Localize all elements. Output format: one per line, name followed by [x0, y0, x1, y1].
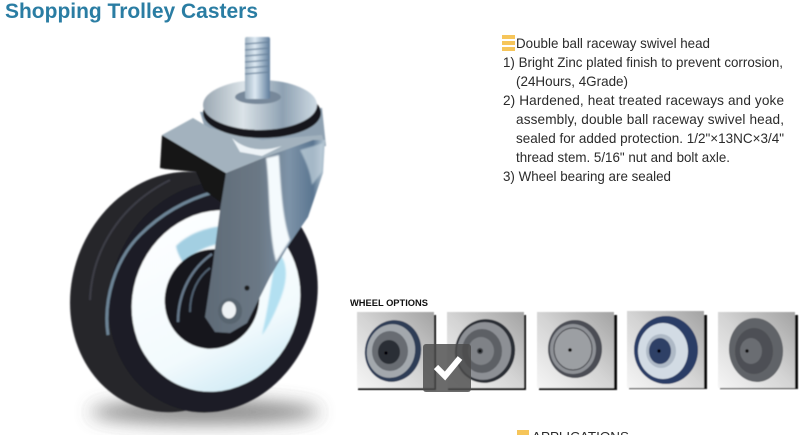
threaded stem — [235, 37, 281, 104]
wheel option 5 — [718, 312, 798, 389]
caster photo illustration — [37, 37, 350, 435]
wheel option 3 — [537, 312, 617, 390]
specification text block: assembly, double ball raceway swivel head, — [516, 112, 784, 127]
specification text block: thread stem. 5/16" nut and bolt axle. — [516, 150, 730, 165]
wheel options heading: WHEEL OPTIONS — [350, 298, 428, 308]
tire — [37, 141, 350, 435]
shoulder — [200, 108, 326, 156]
specification text block: 2) Hardened, heat treated raceways and yoke — [503, 93, 784, 108]
white hub — [105, 185, 327, 417]
specification text block: 1) Bright Zinc plated finish to prevent corrosion, — [503, 55, 783, 70]
specification text block: (24Hours, 4Grade) — [516, 74, 628, 89]
wheel option 2 — [447, 312, 526, 390]
specification text block: Double ball raceway swivel head — [516, 36, 710, 51]
title: Shopping Trolley Casters — [5, 0, 258, 23]
yoke — [205, 140, 325, 333]
wheel option 4 — [627, 311, 707, 389]
axle bolt — [218, 285, 250, 324]
specification text block: 3) Wheel bearing are sealed — [503, 169, 671, 184]
opening — [160, 135, 226, 205]
swivel bracket — [160, 108, 326, 333]
top face — [162, 118, 325, 173]
top plate — [203, 80, 317, 130]
wheel option 1 — [357, 312, 436, 390]
icon: heading bullet — [502, 35, 515, 51]
specification text block — [502, 35, 784, 184]
floor shadow — [90, 400, 320, 424]
selected check badge — [423, 344, 471, 392]
specification text block: sealed for added protection. 1/2"×13NC×3/4" — [516, 131, 784, 146]
wheel options row — [357, 311, 798, 390]
rubber ring — [203, 88, 321, 138]
